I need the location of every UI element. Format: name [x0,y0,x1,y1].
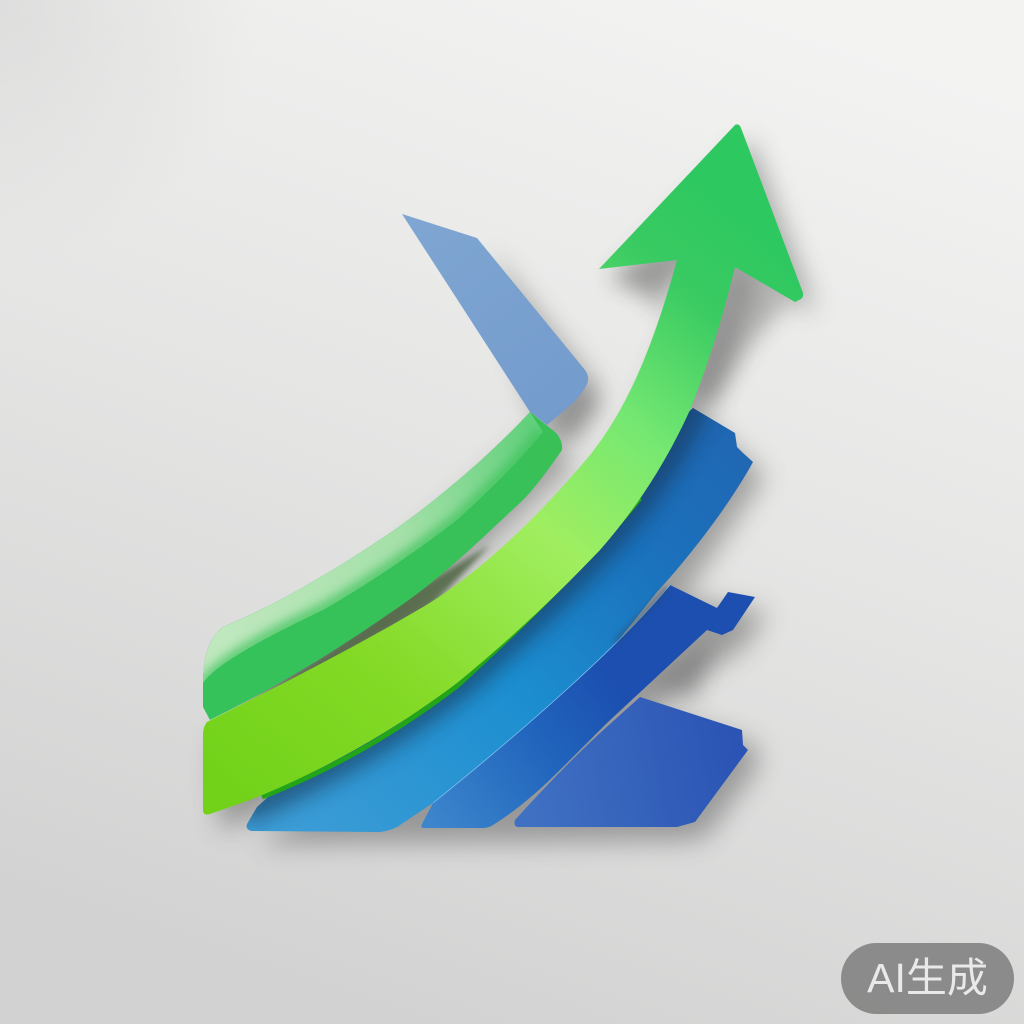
panel: dark blue band [421,585,755,828]
shadow: wedge between green bands [225,545,490,716]
arrow: rising green arrow [203,124,803,814]
soft shadows [215,139,815,844]
panel: blue block [514,697,748,827]
badge: AI generated label [841,943,1014,1014]
panel: upper green band [203,412,562,720]
shadow: under arrow head barbs and shaft [552,264,785,700]
panel: large blue band [246,408,753,832]
badge: AI generated label: AI生成 [867,955,988,1001]
panel: pale blue chevron [402,214,588,425]
